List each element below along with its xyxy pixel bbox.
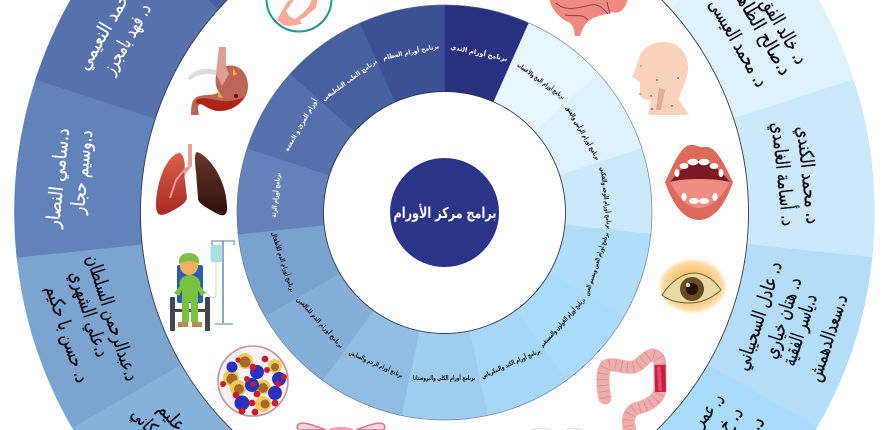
segment: adult blood programme — [254, 252, 380, 380]
outer segment: head and neck — [651, 0, 881, 157]
outer segment: lung — [0, 68, 168, 257]
label: face and jaw programme: برنامج أورام الوجه والفكين — [599, 167, 614, 229]
icon: lungs — [156, 144, 227, 215]
label: bone programme: برنامج أورام العظام — [382, 41, 440, 62]
physicians: adult blood, visible fragments only — [126, 398, 190, 430]
label: breast programme: برنامج أورام الثدي — [450, 42, 508, 63]
label: stomach programme: أورام المرئ و المعدة — [282, 97, 319, 153]
segment: liver programme — [441, 302, 566, 430]
icon: colon — [603, 355, 660, 430]
segment: breast programme — [444, 5, 529, 102]
label: liver programme: برنامج أورام الكبد والبنكرياس — [480, 346, 542, 380]
physicians: child blood: د. حسن با حكيم — [41, 283, 93, 385]
outer segment: colon — [598, 351, 817, 430]
centre circle — [390, 158, 499, 267]
segment: uterus programme — [319, 303, 422, 415]
inner ring: programmes — [223, 0, 668, 430]
outer ring inner edge — [140, 0, 748, 430]
physicians: colon, visible fragments only: د. عمر — [688, 389, 730, 430]
outer segment: eye — [702, 242, 872, 430]
physicians: face and jaw: د. محمد الكندي — [792, 125, 824, 225]
physicians: eye: د. عادل السحيباني — [731, 259, 787, 373]
outer segment: adult blood — [50, 334, 281, 430]
label: kidney programme: برنامج أورام الكلى والبروستاتا — [413, 373, 475, 382]
icon: open mouth — [665, 145, 733, 220]
label: uterus programme: برنامج أورام الرحم والمبايض — [348, 348, 405, 379]
label: brain programme: برنامج أورام المخ والأعصاب — [516, 60, 567, 101]
label: colon programme: برنامج أورام القولون والمستقيم — [537, 295, 587, 349]
physicians: face and jaw — [767, 121, 824, 227]
label: palliative programme: برنامج الطب التلطيفي — [320, 57, 379, 103]
segment: child blood programme — [223, 195, 349, 316]
outer segment: brain and nerves — [557, 0, 779, 30]
physicians: eye: د. هتان خياري — [760, 275, 806, 361]
centre title: برامج مركز الأورام — [394, 204, 496, 222]
segment: bone programme — [360, 0, 477, 112]
inner ring outer edge — [237, 5, 652, 420]
icon: hands in teal circle — [266, 0, 332, 32]
physicians: child blood: د.عبدالرحمن السلطان — [81, 252, 143, 384]
physicians: lung: د.وسيم حجار — [67, 129, 97, 216]
label: eye programme: برنامج أورام العين وبصمم العين — [582, 231, 611, 297]
label: lung programme: برنامج أورام الرئة — [269, 172, 282, 218]
icon: uterus — [297, 423, 385, 430]
segment: brain programme — [489, 23, 606, 146]
icon: brain — [549, 0, 628, 36]
label: adult blood programme: برنامج أورام الدم للبالغين — [295, 295, 346, 350]
physicians: child blood: د.علي الشهري — [65, 268, 113, 360]
outer segment: child blood — [0, 200, 204, 428]
icon: blood cells — [218, 346, 288, 416]
physicians: lung: د.سامي النصار — [42, 127, 74, 230]
segment: head and neck programme — [527, 74, 655, 201]
inner ring inner edge — [324, 92, 566, 334]
physicians: lung — [42, 127, 97, 230]
label: head and neck programme: برنامج أورام الرأس والعنق — [564, 104, 603, 161]
segment: eye programme — [546, 224, 651, 318]
icon: patient in wheelchair with IV drip — [170, 240, 234, 331]
physicians: colon, visible fragments only — [688, 389, 769, 430]
physicians: face and jaw: د. أسامة الغامدي — [767, 121, 801, 227]
physicians: child blood — [41, 252, 143, 385]
segment: kidney programme — [385, 321, 488, 430]
segment: face and jaw programme — [550, 148, 668, 259]
outer segment: palliative — [125, 0, 355, 27]
icon: head and neck — [632, 42, 689, 115]
segment: stomach programme — [247, 68, 365, 178]
physicians: eye: د.سعدالدهمش — [804, 292, 852, 384]
segment: colon programme — [498, 268, 624, 389]
segment: lung programme — [229, 140, 335, 234]
label: child blood programme: برنامج أورام الدم للأطفال — [269, 230, 297, 293]
physicians: eye — [731, 259, 852, 384]
segment: palliative programme — [290, 11, 419, 139]
icon: eye — [658, 258, 728, 314]
icon: kidneys — [530, 428, 583, 430]
outer segment: face and jaw — [709, 80, 890, 293]
outer segment: stomach — [36, 0, 234, 127]
icon: stomach — [188, 47, 248, 115]
physicians: eye: د.ياسر الفقية — [778, 291, 822, 369]
